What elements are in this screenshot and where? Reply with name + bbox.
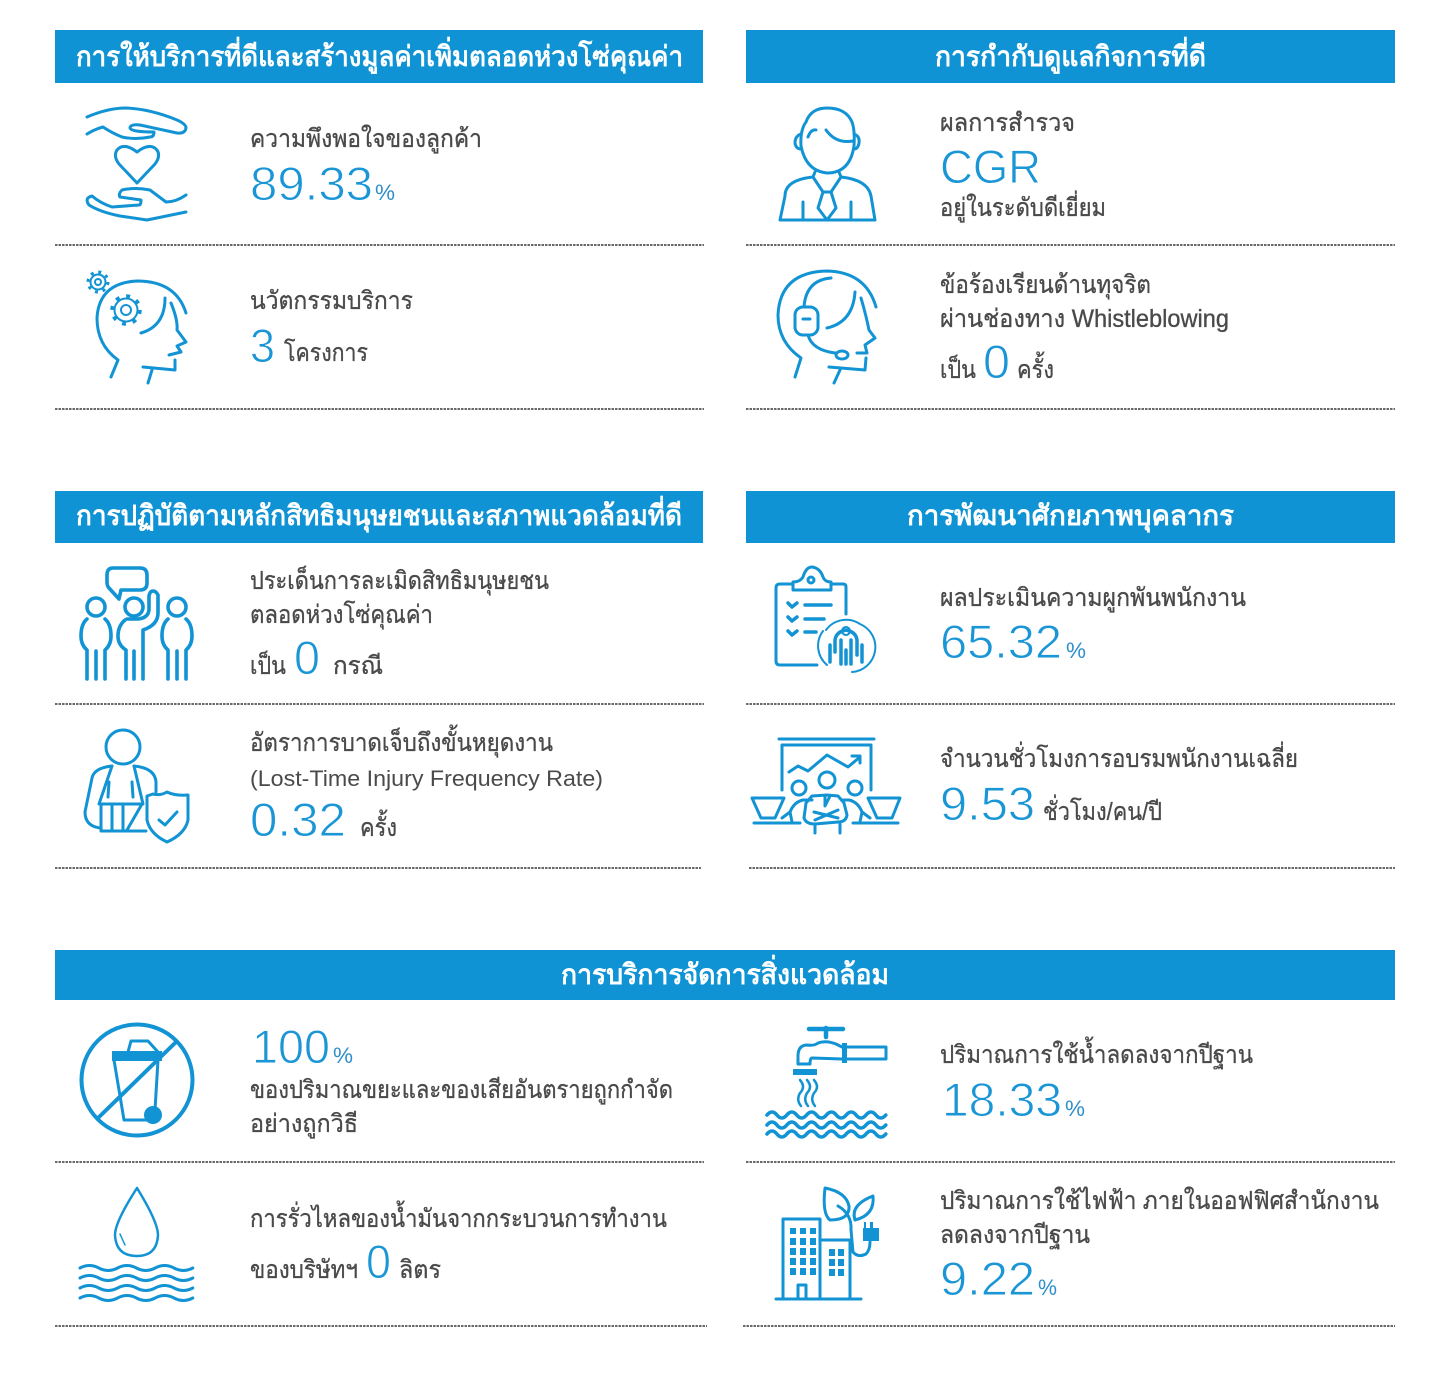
panel: human rights and safety (55, 491, 703, 846)
electricity use text: % (1038, 1275, 1057, 1300)
water use text: ปริมาณการใช้น้ำลดลงจากปีฐาน (940, 1036, 1253, 1069)
hazardous waste text: อย่างถูกวิธี (250, 1110, 358, 1139)
CGR survey text: อยู่ในระดับดีเยี่ยม (940, 190, 1106, 223)
icon: training room (752, 739, 900, 833)
oil leak text: ลิตร (399, 1256, 441, 1284)
icon: oil drop over water (80, 1188, 193, 1300)
customer satisfaction text (250, 124, 482, 210)
engagement text: 65.32 (940, 615, 1062, 668)
whistleblowing text (940, 271, 1229, 388)
icon: businessman (780, 108, 875, 220)
whistleblowing text: 0 (983, 335, 1010, 388)
oil leak text: 0 (366, 1235, 391, 1288)
panel: people development (746, 491, 1395, 833)
icon: head with gears (88, 272, 186, 383)
human rights text: ประเด็นการละเมิดสิทธิมนุษยชน (250, 565, 549, 596)
oil leak text: การรั่วไหลของน้ำมันจากกระบวนการทำงาน (250, 1200, 667, 1233)
water use text (940, 1036, 1253, 1126)
whistleblowing text: ข้อร้องเรียนด้านทุจริต (940, 271, 1151, 300)
panel: value chain service (55, 30, 703, 383)
customer satisfaction text: % (375, 180, 395, 205)
service innovation text: 3 (250, 319, 275, 372)
service innovation text: โครงการ (284, 338, 368, 367)
heading: environmental management: การบริการจัดการสิ่งแวดล้อม (561, 954, 889, 990)
heading: environmental management (55, 950, 1395, 1000)
human rights text: ตลอดห่วงโซ่คุณค่า (250, 600, 433, 630)
icon: clipboard with people (776, 567, 875, 672)
icon: injured worker with shield (85, 730, 188, 842)
heading: corporate governance (746, 30, 1395, 83)
injury rate text: อัตราการบาดเจ็บถึงขั้นหยุดงาน (250, 724, 553, 758)
engagement text: ผลประเมินความผูกพันพนักงาน (940, 584, 1246, 613)
electricity use text: ปริมาณการใช้ไฟฟ้า ภายในออฟฟิศสำนักงาน (940, 1186, 1379, 1215)
heading: people development (746, 491, 1395, 543)
CGR survey text (940, 109, 1106, 223)
CGR survey text: CGR (940, 140, 1041, 193)
heading: corporate governance: การกำกับดูแลกิจการที่ดี (935, 36, 1206, 74)
hazardous waste text: 100 (252, 1020, 330, 1073)
icon: crossed-out waste bin (82, 1024, 192, 1136)
heading: human rights: การปฏิบัติตามหลักสิทธิมนุษยชนและสภาพแวดล้อมที่ดี (76, 495, 682, 533)
training hours text: ชั่วโมง/คน/ปี (1043, 794, 1162, 826)
water use text: 18.33 (942, 1073, 1062, 1126)
icon: hands holding heart (87, 108, 186, 220)
heading: human rights (55, 491, 703, 543)
icon: tap and water (767, 1028, 886, 1137)
human rights text (250, 565, 549, 684)
service innovation text: นวัตกรรมบริการ (250, 287, 413, 315)
service innovation text (250, 287, 413, 372)
oil leak text: ของบริษัทฯ (250, 1256, 358, 1284)
CGR survey text: ผลการสำรวจ (940, 109, 1075, 137)
electricity use text: ลดลงจากปีฐาน (940, 1221, 1090, 1249)
human rights text: กรณี (333, 652, 383, 680)
engagement text: % (1066, 638, 1086, 663)
training hours text: 9.53 (940, 777, 1035, 830)
injury rate text: 0.32 (250, 793, 346, 846)
training hours text (940, 741, 1298, 830)
customer satisfaction text: ความพึงพอใจของลูกค้า (250, 124, 482, 154)
whistleblowing text: ครั้ง (1017, 351, 1054, 384)
human rights text: เป็น (250, 650, 286, 680)
whistleblowing text: เป็น (940, 354, 976, 384)
injury rate text (250, 724, 603, 846)
injury rate text: (Lost-Time Injury Frequency Rate) (250, 766, 603, 791)
heading: value chain service: การให้บริการที่ดีและสร้างมูลค่าเพิ่มตลอดห่วงโซ่คุณค่า (76, 36, 683, 74)
customer satisfaction text: 89.33 (250, 157, 373, 210)
panel: environmental management (55, 950, 1395, 1305)
human rights text: 0 (294, 631, 320, 684)
icon: building with plant and plug (776, 1188, 879, 1299)
water use text: % (1065, 1096, 1085, 1121)
heading: value chain service (55, 30, 703, 83)
heading: people development: การพัฒนาศักยภาพบุคลากร (907, 500, 1234, 533)
hazardous waste text: ของปริมาณขยะและของเสียอันตรายถูกกำจัด (250, 1076, 673, 1105)
icon: people with speech bubble (81, 568, 192, 679)
engagement text (940, 584, 1246, 668)
electricity use text: 9.22 (940, 1252, 1035, 1305)
panel: corporate governance (746, 30, 1395, 388)
hazardous waste text: % (333, 1043, 353, 1068)
injury rate text: ครั้ง (360, 809, 397, 842)
icon: head with headset (778, 271, 876, 383)
training hours text: จำนวนชั่วโมงการอบรมพนักงานเฉลี่ย (940, 741, 1298, 773)
hazardous waste text (250, 1020, 673, 1139)
whistleblowing text: ผ่านช่องทาง Whistleblowing (940, 305, 1229, 333)
oil leak text (250, 1200, 667, 1288)
electricity use text (940, 1186, 1379, 1305)
